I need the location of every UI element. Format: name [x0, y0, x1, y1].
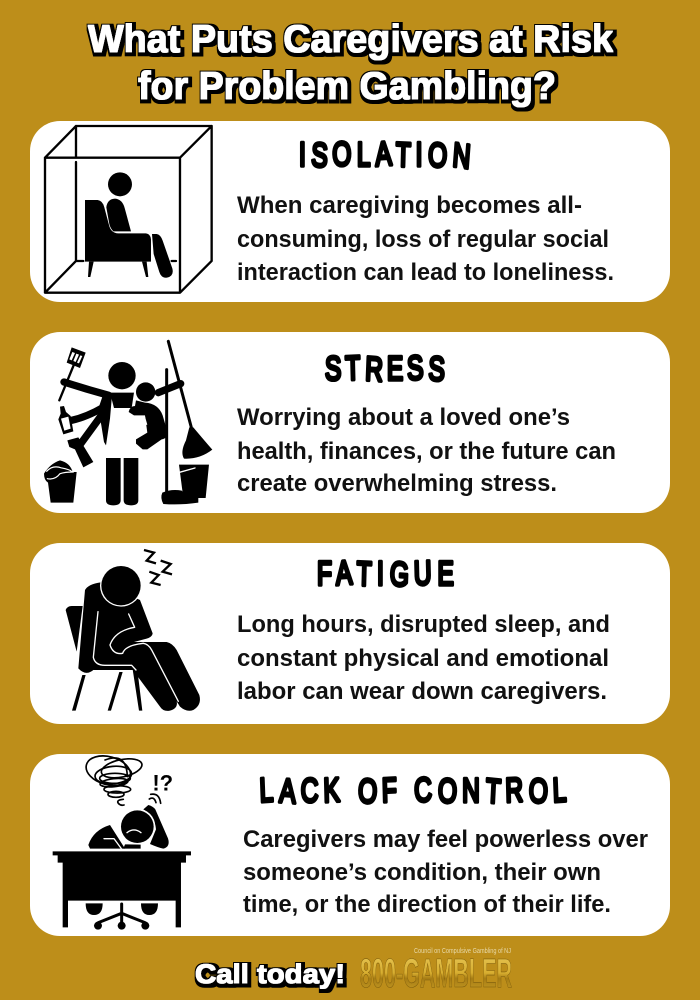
icon: stressed person at desk: [53, 751, 191, 930]
icon: tired person on chair: [66, 550, 200, 711]
icon: stressed person at desk: !?: [152, 771, 173, 796]
text: stress: health, finances, or the future can: [237, 438, 616, 465]
title: for Problem Gambling?: [138, 65, 556, 108]
call to action: Call today!: [195, 959, 345, 989]
text: isolation: interaction can lead to loneliness.: [237, 259, 614, 286]
panel: isolation: [30, 121, 670, 302]
text: fatigue: [237, 611, 610, 705]
swirl: [83, 751, 144, 805]
text: isolation: consuming, loss of regular social: [237, 226, 609, 253]
heading: lack of control: LACK OF CONTROL: [259, 771, 567, 811]
text: lack of control: [243, 826, 648, 918]
icon: person in glass box: [45, 126, 212, 293]
text: lack of control: someone’s condition, their own: [243, 859, 601, 886]
lower arm and tool: [80, 414, 103, 445]
panel: lack of control: [30, 751, 670, 936]
bottle arm: [72, 407, 104, 420]
bucket: [44, 460, 77, 503]
mop and broom: [162, 370, 171, 492]
desk: [53, 851, 191, 927]
text: fatigue: Long hours, disrupted sleep, and: [237, 611, 610, 638]
panel: stress: [30, 332, 670, 513]
heading: fatigue: FATIGUE: [317, 554, 454, 594]
heading: isolation: ISOLATION: [299, 135, 472, 177]
icon: multitasking caregiver: [44, 341, 212, 505]
text: isolation: [237, 192, 614, 286]
spatula arm: [64, 382, 109, 395]
panel: fatigue: [30, 543, 670, 724]
heading: stress: STRESS: [325, 349, 445, 389]
arms and head: [143, 805, 169, 849]
text: stress: [237, 404, 616, 497]
office chair: [86, 903, 158, 915]
title: [88, 18, 614, 108]
chair: [66, 606, 83, 652]
title: What Puts Caregivers at Risk: [88, 18, 614, 61]
text: fatigue: constant physical and emotional: [237, 645, 609, 672]
logo: 800-GAMBLER: Council on Compulsive Gambling of NJ: [414, 948, 511, 955]
text: isolation: When caregiving becomes all-: [237, 192, 582, 219]
text: fatigue: labor can wear down caregivers.: [237, 678, 607, 705]
text: lack of control: Caregivers may feel powerless over: [243, 826, 648, 853]
baby: [135, 381, 157, 403]
logo: 800-GAMBLER: 800-GAMBLER: [360, 950, 512, 996]
logo: 800-GAMBLER: [360, 948, 512, 996]
text: stress: create overwhelming stress.: [237, 470, 557, 497]
body: [78, 582, 200, 711]
text: lack of control: time, or the direction of their life.: [243, 891, 611, 918]
text: stress: Worrying about a loved one’s: [237, 404, 570, 431]
